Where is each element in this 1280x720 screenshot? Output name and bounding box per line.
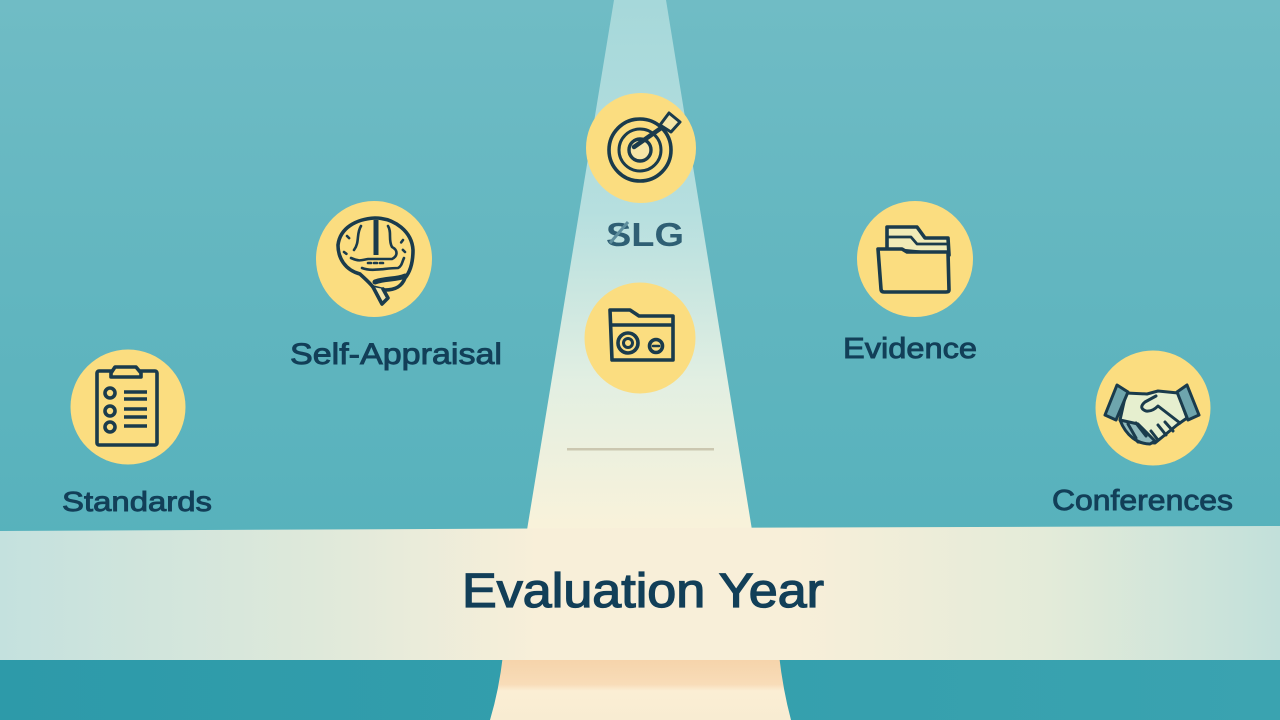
icon: brain bbox=[338, 218, 413, 304]
lower path segment bbox=[490, 655, 791, 720]
label: self-appraisal: Self-Appraisal bbox=[290, 338, 502, 371]
item: self-appraisal bbox=[290, 201, 502, 371]
icon: folder with papers bbox=[878, 227, 949, 292]
band title: Evaluation Year bbox=[462, 565, 824, 618]
central light path bbox=[527, 0, 752, 530]
label: conferences: Conferences bbox=[1052, 485, 1233, 517]
path divider line bbox=[567, 448, 714, 450]
lower background strip bbox=[0, 655, 1280, 720]
icon: clipboard checklist bbox=[97, 367, 157, 445]
icon: handshake bbox=[1105, 385, 1199, 444]
label: evidence: Evidence bbox=[843, 333, 977, 365]
evaluation year band bbox=[0, 526, 1280, 660]
label: SLG: SLG bbox=[606, 216, 684, 253]
item: evidence bbox=[843, 201, 977, 365]
item: target and SLG bbox=[586, 93, 696, 253]
item: conferences bbox=[1052, 350, 1233, 517]
item: standards bbox=[62, 350, 212, 517]
icon: target with arrow bbox=[609, 113, 680, 181]
item: folder with circles bbox=[584, 282, 696, 394]
label: standards: Standards bbox=[62, 486, 212, 517]
icon: folder with dials bbox=[610, 310, 673, 360]
